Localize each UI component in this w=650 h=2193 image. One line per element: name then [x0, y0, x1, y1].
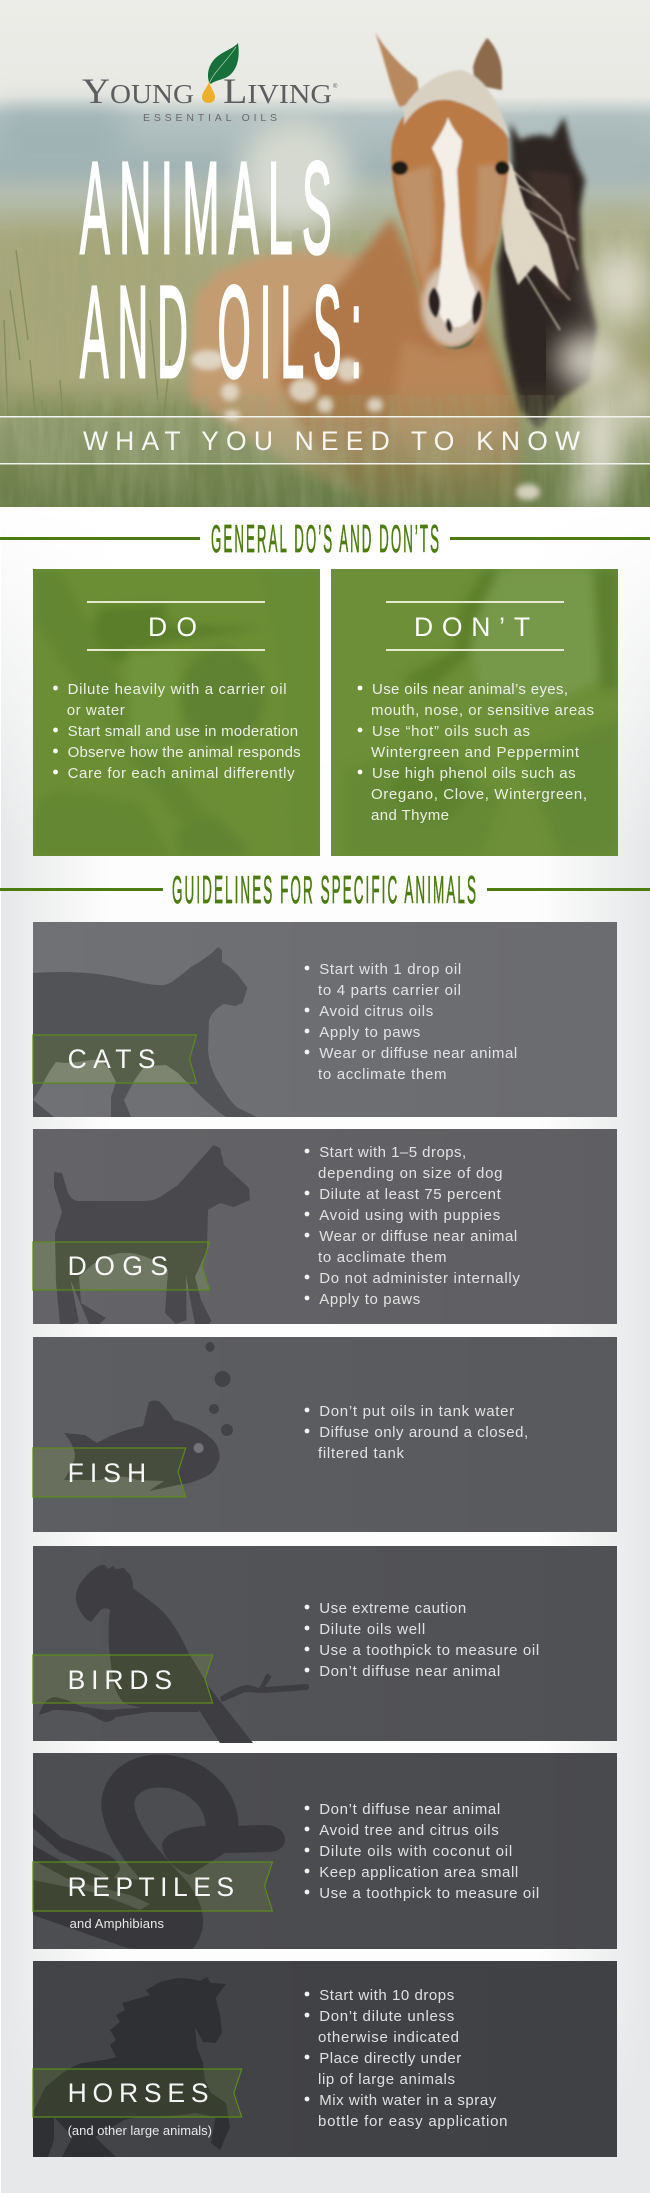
ribbon: horses: HORSES — [68, 2078, 209, 2108]
wordmark: ® — [333, 83, 338, 90]
fish list: filtered tank — [318, 1445, 404, 1462]
reptiles list: Dilute oils with coconut oil — [319, 1843, 512, 1860]
title — [80, 134, 371, 405]
fish list: Diffuse only around a closed, — [319, 1424, 528, 1441]
lower muzzle shade — [440, 332, 478, 350]
face — [391, 97, 508, 348]
dogs list — [305, 1144, 520, 1308]
cats list: to 4 parts carrier oil — [318, 982, 461, 999]
wordmark — [82, 71, 338, 111]
left ear — [375, 32, 420, 107]
page background — [0, 507, 650, 2193]
sky and field backdrop — [0, 98, 650, 507]
icon: dog silhouette — [54, 1145, 250, 1324]
fish list — [305, 1403, 528, 1462]
faded photo: woman and kitten — [386, 569, 618, 850]
don't list: mouth, nose, or sensitive areas — [371, 702, 594, 719]
panel: cats — [33, 922, 617, 1117]
panel: horses — [33, 1961, 617, 2157]
don't list: Use “hot” oils such as — [372, 723, 530, 740]
panel: do — [33, 569, 320, 856]
icon: fish silhouette and bubbles — [64, 1342, 233, 1491]
horses list: Start with 10 drops — [319, 1987, 454, 2004]
ribbon: horses — [33, 1977, 242, 2157]
chestnut horse body — [190, 217, 520, 507]
ribbon: dogs — [32, 1241, 210, 1291]
cats list — [305, 961, 517, 1083]
meadow grass stems — [3, 250, 171, 414]
dogs list: Do not administer internally — [319, 1270, 520, 1287]
reptiles list — [305, 1801, 539, 1902]
do list: Observe how the animal responds — [68, 744, 301, 761]
do heading: DO — [148, 612, 197, 642]
faded photo: person and dog — [42, 578, 262, 853]
reptiles list: Avoid tree and citrus oils — [319, 1822, 499, 1839]
tagline: ESSENTIAL OILS — [143, 112, 277, 124]
birds list: Don’t diffuse near animal — [319, 1663, 500, 1680]
right ear — [473, 38, 502, 90]
reptiles list: Keep application area small — [319, 1864, 518, 1881]
horses list: Place directly under — [319, 2050, 461, 2067]
do list: or water — [67, 702, 125, 719]
dogs list: Wear or diffuse near animal — [319, 1228, 517, 1245]
cats list: Start with 1 drop oil — [319, 961, 461, 978]
dogs list: to acclimate them — [318, 1249, 446, 1266]
cats list: Avoid citrus oils — [319, 1003, 433, 1020]
horses list: otherwise indicated — [318, 2029, 459, 2046]
reptiles list: Use a toothpick to measure oil — [319, 1885, 539, 1902]
foreground grass tint — [0, 380, 650, 507]
blond mane — [498, 150, 578, 330]
cats list: Apply to paws — [319, 1024, 420, 1041]
foreground flowers, blurred — [556, 250, 650, 509]
cats list: Wear or diffuse near animal — [319, 1045, 517, 1062]
don't list: Use oils near animal’s eyes, — [372, 681, 568, 698]
horses sublabel: (and other large animals) — [68, 2123, 212, 2138]
panel: reptiles — [33, 1753, 617, 1952]
horses list: Mix with water in a spray — [319, 2092, 497, 2109]
nostrils — [428, 287, 482, 333]
dogs list: Avoid using with puppies — [319, 1207, 500, 1224]
birds list — [305, 1600, 539, 1680]
dogs list: Apply to paws — [319, 1291, 420, 1308]
icon: parrot on a branch silhouette — [39, 1565, 309, 1743]
blurred haze and trees — [0, 93, 646, 422]
left eye — [392, 161, 408, 175]
horses list: Don’t dilute unless — [319, 2008, 454, 2025]
panel: birds — [33, 1546, 617, 1743]
cats list: to acclimate them — [318, 1066, 446, 1083]
meadow grass texture — [238, 230, 321, 238]
birds list: Use extreme caution — [319, 1600, 466, 1617]
ribbon: dogs: DOGS — [68, 1251, 168, 1281]
birds list: Dilute oils well — [319, 1621, 425, 1638]
ribbon: birds: BIRDS — [68, 1665, 172, 1695]
ribbon: cats — [32, 1034, 198, 1084]
horses list: lip of large animals — [318, 2071, 455, 2088]
subtitle band tint — [0, 417, 650, 464]
horses list — [305, 1987, 508, 2130]
birds list: Use a toothpick to measure oil — [319, 1642, 539, 1659]
icon: oil drop — [202, 82, 215, 103]
ribbon: fish: FISH — [68, 1458, 146, 1488]
do list — [53, 681, 301, 782]
chestnut horse head — [375, 32, 510, 349]
wordmark: LIVING — [223, 71, 332, 111]
do list: Care for each animal differently — [68, 765, 295, 782]
don't list: Wintergreen and Peppermint — [371, 744, 580, 761]
panel: don't — [331, 569, 618, 856]
don't list: and Thyme — [371, 807, 449, 824]
muzzle — [422, 263, 484, 347]
ribbon: cats: CATS — [68, 1044, 156, 1074]
icon: rearing horse silhouette — [33, 1977, 230, 2157]
dogs list: Dilute at least 75 percent — [319, 1186, 502, 1203]
don't list: Use high phenol oils such as — [372, 765, 576, 782]
hero photo: horses in a meadow — [0, 0, 650, 509]
subtitle: WHAT YOU NEED TO KNOW — [83, 426, 580, 456]
fish list: Don’t put oils in tank water — [319, 1403, 514, 1420]
ribbon: reptiles — [33, 1771, 285, 1952]
ribbon: reptiles: REPTILES — [68, 1872, 234, 1902]
right eye — [495, 161, 509, 175]
thistle flowers — [191, 350, 540, 500]
reptiles sublabel: and Amphibians — [70, 1916, 164, 1931]
white blaze — [432, 117, 476, 327]
ribbon: birds — [32, 1654, 214, 1704]
icon: cat silhouette — [33, 947, 257, 1117]
forelock — [404, 70, 510, 138]
dogs list: Start with 1–5 drops, — [319, 1144, 466, 1161]
logo: Young Living Essential Oils — [82, 43, 338, 124]
heading: general do's and don'ts — [0, 518, 650, 561]
icon: leaf — [208, 43, 239, 84]
cheek shading — [396, 165, 506, 290]
do list: Start small and use in moderation — [68, 723, 298, 740]
foreground grass texture — [0, 395, 650, 507]
ribbon: fish — [32, 1447, 186, 1498]
panel: fish — [33, 1337, 617, 1532]
dogs list: depending on size of dog — [318, 1165, 502, 1182]
reptiles list: Don’t diffuse near animal — [319, 1801, 500, 1818]
black horse behind — [497, 117, 597, 430]
panel: dogs — [33, 1129, 617, 1324]
wordmark: YOUNG — [82, 71, 194, 111]
don't list — [358, 681, 594, 824]
don't heading: DON’T — [414, 612, 530, 642]
icon: snake silhouette — [33, 1771, 285, 1952]
don't list: Oregano, Clove, Wintergreen, — [371, 786, 587, 803]
horses list: bottle for easy application — [318, 2113, 508, 2130]
do list: Dilute heavily with a carrier oil — [68, 681, 287, 698]
